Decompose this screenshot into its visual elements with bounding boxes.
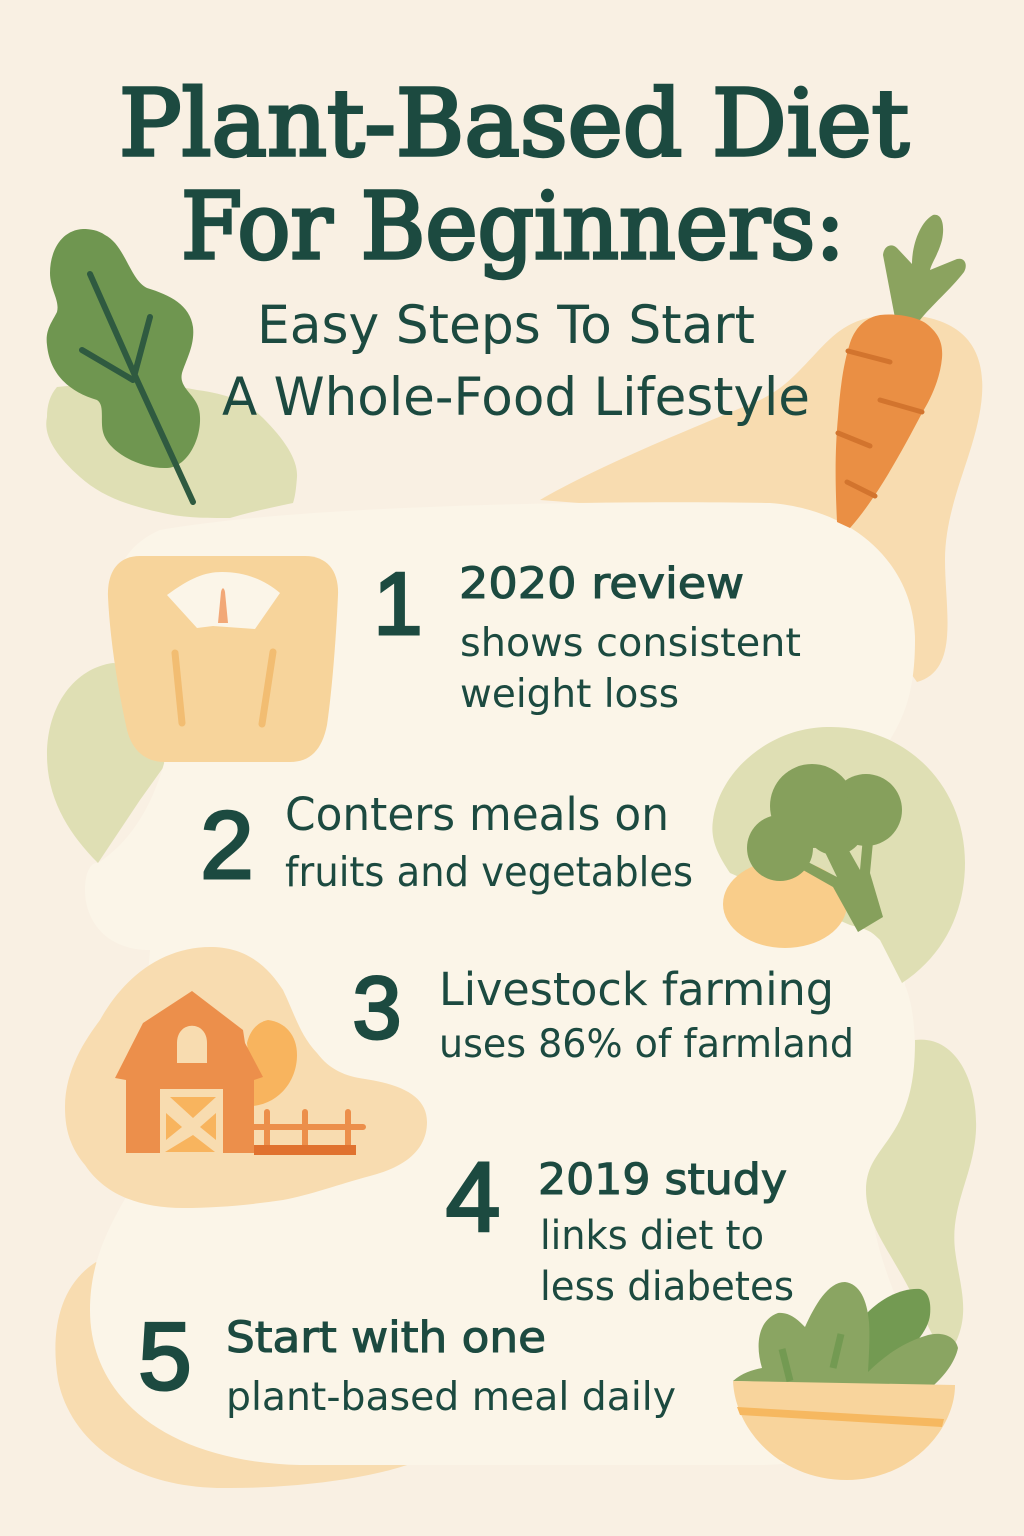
step 1: 1 <box>374 554 422 653</box>
blob: peach behind barn <box>65 947 427 1208</box>
title <box>119 70 909 280</box>
subtitle <box>222 295 810 428</box>
step 4: 4 <box>446 1142 500 1252</box>
step 2 <box>200 788 693 899</box>
title: For Beginners: <box>181 173 845 280</box>
blob: sage right <box>866 1040 976 1360</box>
subtitle: Easy Steps To Start <box>257 295 755 356</box>
step 4: 2019 study <box>538 1155 787 1205</box>
icon: salad bowl <box>733 1282 958 1480</box>
blob: sage behind broccoli <box>712 727 965 983</box>
step 1: shows consistent <box>460 621 801 666</box>
step 2: 2 <box>200 792 254 899</box>
step 3: uses 86% of farmland <box>439 1022 854 1067</box>
panel: cream content area <box>85 502 915 1465</box>
step 5: plant-based meal daily <box>226 1375 676 1420</box>
step 2: fruits and vegetables <box>285 848 693 896</box>
icon: scale <box>108 556 338 762</box>
step 3 <box>353 958 854 1067</box>
blob: sage left <box>47 663 165 863</box>
blob: peach behind carrot <box>540 315 982 682</box>
subtitle: A Whole-Food Lifestyle <box>222 367 810 428</box>
step 5: 5 <box>138 1303 192 1410</box>
title: Plant-Based Diet <box>119 70 909 177</box>
step 1: 2020 review <box>459 559 744 609</box>
icon: barn <box>115 991 363 1155</box>
icon: carrot <box>836 215 966 528</box>
step 4: less diabetes <box>540 1264 794 1310</box>
step 2: Conters meals on <box>285 788 669 841</box>
step 4: links diet to <box>540 1213 764 1259</box>
step 1 <box>374 554 801 717</box>
step 1: weight loss <box>460 672 679 717</box>
blob: sage behind leaf <box>46 384 297 518</box>
icon: leaf <box>47 229 200 502</box>
step 4 <box>446 1142 794 1310</box>
step 5 <box>138 1303 676 1420</box>
blob: peach bottom left <box>55 1262 410 1488</box>
step 3: Livestock farming <box>439 963 834 1016</box>
step 3: 3 <box>353 958 401 1057</box>
step 5: Start with one <box>226 1313 546 1363</box>
icon: broccoli <box>723 764 902 948</box>
